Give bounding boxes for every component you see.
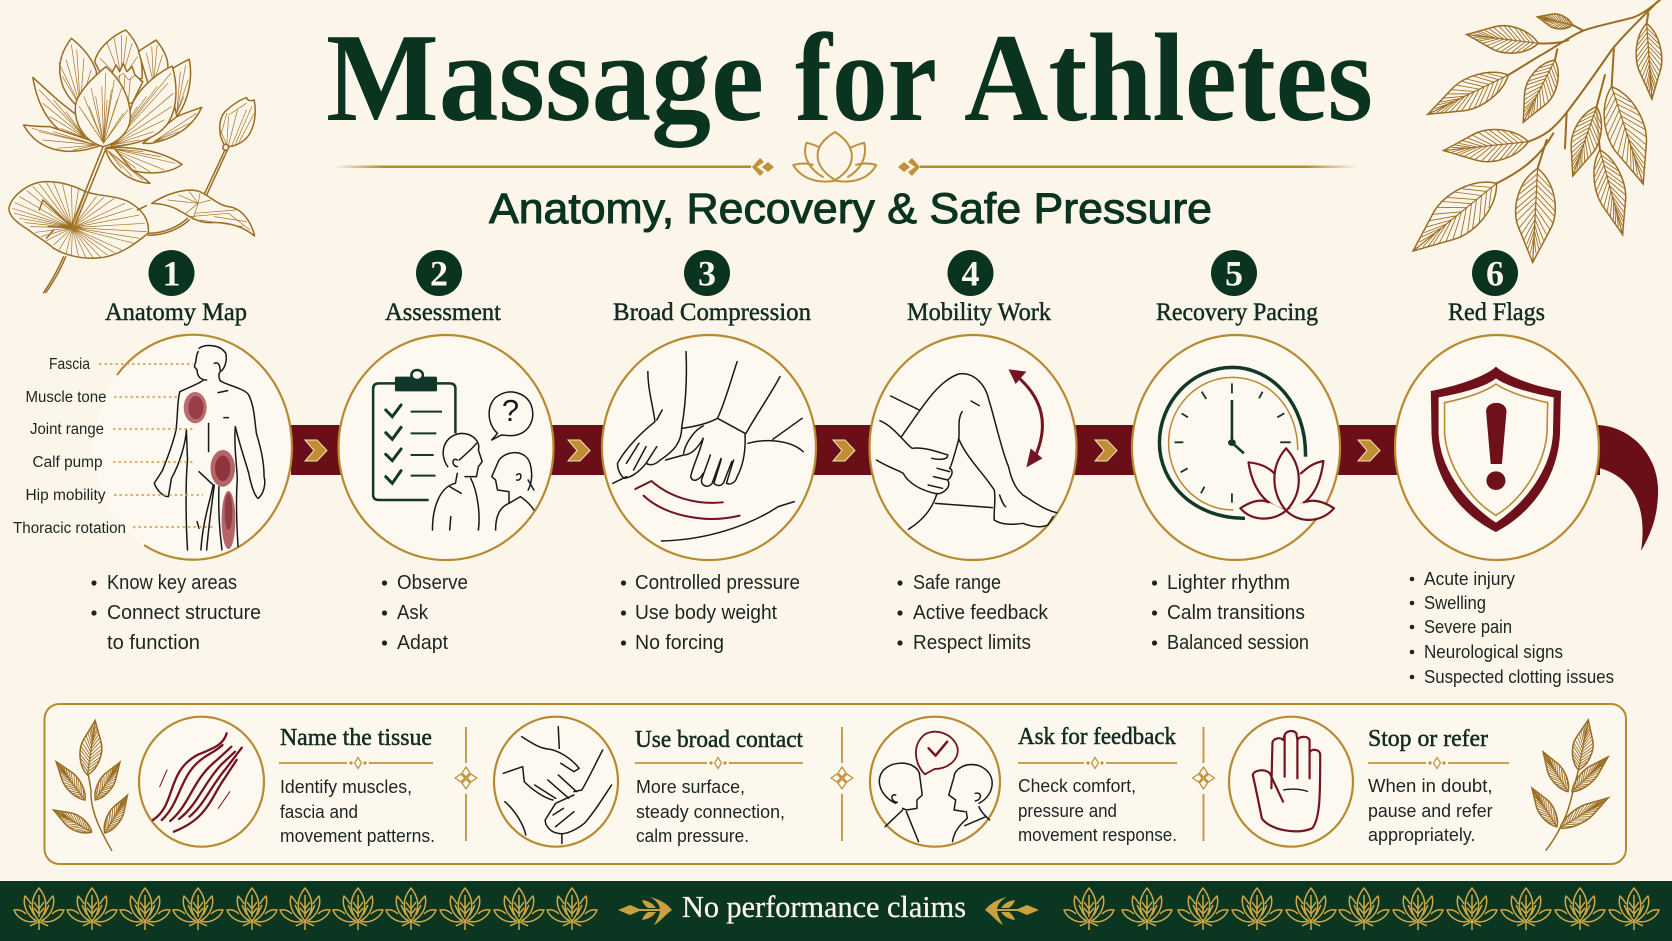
number badge 5: 5 (1225, 254, 1243, 294)
title: Athletes (964, 9, 1373, 148)
illustration: lotus flower top left (9, 30, 255, 293)
icon: raised hand (1253, 731, 1320, 831)
anatomy callout lines (99, 364, 215, 527)
description (1018, 776, 1177, 845)
bullets: recovery pacing: Lighter rhythm (1167, 572, 1290, 594)
bullets: recovery pacing: Calm transitions (1167, 602, 1305, 624)
bullets: anatomy map (91, 572, 261, 654)
number badge 4: 4 (962, 254, 980, 294)
step 5: recovery pacing (1132, 250, 1340, 654)
footer statement: No performance claims (682, 889, 966, 924)
title divider with lotus (333, 132, 1358, 182)
heading: assessment: Assessment (385, 299, 501, 326)
panel frame (44, 704, 1626, 864)
bullets: anatomy map: Connect structure (107, 602, 261, 624)
vertical divider 3 (1192, 727, 1214, 841)
title (326, 9, 1373, 148)
hands circle (494, 717, 618, 847)
heading: anatomy map: Anatomy Map (105, 299, 247, 326)
body figure with highlighted areas (154, 346, 265, 550)
bullets: assessment: Ask (397, 602, 429, 624)
question mark: ? (502, 393, 519, 428)
assessment circle (338, 335, 554, 560)
small divider (1368, 758, 1509, 768)
icon: left sprig arrow (618, 897, 672, 925)
heading: mobility work: Mobility Work (907, 299, 1051, 326)
anatomy labels: Muscle tone (26, 389, 106, 406)
tip: use broad contact (494, 717, 803, 847)
heading: stop or refer: Stop or refer (1368, 726, 1488, 752)
red flags circle (1395, 335, 1599, 560)
anatomy labels: Hip mobility (26, 487, 106, 504)
number badge 3 (684, 250, 730, 296)
bullets: broad compression: Controlled pressure (635, 572, 800, 594)
arrow chevrons on ribbon (305, 440, 1380, 461)
feedback circle (870, 717, 1000, 847)
title: for (795, 9, 937, 148)
heading: use broad contact: Use broad contact (635, 727, 803, 753)
icon: clipboard and two people (373, 370, 534, 530)
description: movement patterns. (280, 826, 435, 846)
bullets: assessment: Observe (397, 572, 468, 594)
muscle circle (139, 717, 264, 847)
icon: muscle fibres (153, 733, 242, 832)
icon: two faces with check bubble (879, 732, 992, 842)
step 4: mobility work (870, 250, 1076, 654)
bullets: broad compression (621, 572, 800, 654)
bullets: broad compression: No forcing (635, 632, 724, 654)
bullets: mobility work: Active feedback (913, 602, 1049, 624)
bullets: mobility work: Safe range (913, 572, 1001, 594)
bullets: red flags: Severe pain (1424, 617, 1512, 637)
recovery circle (1132, 335, 1340, 560)
bullets: red flags (1410, 569, 1614, 687)
ribbon connector with tail (291, 425, 1658, 551)
bullets: broad compression: Use body weight (635, 602, 777, 624)
description (280, 777, 435, 846)
step 1: anatomy map (13, 250, 292, 654)
anatomy labels: Fascia (49, 356, 90, 373)
footer band (0, 881, 1672, 941)
bullets: anatomy map: Know key areas (107, 572, 237, 594)
icon: hands applying pressure (613, 352, 803, 541)
description: When in doubt, (1368, 776, 1492, 796)
description: calm pressure. (636, 826, 749, 846)
compression circle (602, 335, 816, 560)
anatomy labels (13, 356, 126, 537)
number badge 3: 3 (698, 254, 716, 294)
tip: name the tissue (139, 717, 435, 847)
description (636, 777, 785, 846)
number badge 6: 6 (1486, 254, 1504, 294)
bullets: anatomy map: to function (107, 632, 200, 654)
bullets: assessment (382, 572, 468, 654)
subtitle: Anatomy, Recovery & Safe Pressure (489, 185, 1212, 233)
step 3: broad compression (602, 250, 816, 654)
icon: warning shield (1431, 367, 1561, 532)
bullets: assessment: Adapt (397, 632, 448, 654)
number badge 2 (416, 250, 462, 296)
description: Identify muscles, (280, 777, 412, 797)
title: Massage (326, 9, 764, 148)
panel: practice tips (44, 704, 1626, 864)
bullets: red flags: Acute injury (1424, 569, 1515, 589)
icon: bent knee with hand and range arrow (876, 369, 1057, 529)
number badge 4 (948, 250, 994, 296)
description: movement response. (1018, 825, 1177, 845)
vertical divider 1 (455, 727, 477, 841)
bullets: red flags: Swelling (1424, 593, 1486, 613)
left lotus pattern (14, 888, 597, 930)
description: steady connection, (636, 802, 785, 822)
small divider (1018, 758, 1177, 768)
description: Check comfort, (1018, 776, 1136, 796)
step 6: red flags (1395, 250, 1614, 687)
icon: clock with lotus (1159, 367, 1334, 520)
description (1368, 776, 1492, 845)
step 2: assessment (338, 250, 554, 654)
small divider (635, 758, 803, 768)
number badge 1: 1 (162, 254, 180, 294)
anatomy labels: Calf pump (32, 454, 102, 471)
right lotus pattern (1064, 888, 1659, 930)
heading: red flags: Red Flags (1448, 299, 1545, 326)
anatomy labels: Joint range (30, 421, 104, 438)
icon: right sprig (1526, 718, 1613, 851)
number badge 5 (1211, 250, 1257, 296)
icon: left sprig (50, 719, 133, 851)
anatomy circle (94, 335, 292, 560)
heading: ask for feedback: Ask for feedback (1018, 724, 1176, 750)
illustration: leaf branch top right (1400, 0, 1665, 267)
description: appropriately. (1368, 825, 1476, 845)
icon: two hands (503, 727, 612, 843)
bullets: mobility work: Respect limits (913, 632, 1031, 654)
number badge 2: 2 (430, 254, 448, 294)
number badge 1 (148, 250, 194, 296)
heading: name the tissue: Name the tissue (280, 725, 432, 751)
heading: broad compression: Broad Compression (613, 299, 811, 326)
icon: right sprig arrow (985, 897, 1039, 925)
small divider (279, 758, 433, 768)
description: More surface, (636, 777, 745, 797)
hand circle (1229, 717, 1353, 847)
bullets: recovery pacing (1152, 572, 1309, 654)
bullets: red flags: Suspected clotting issues (1424, 667, 1614, 687)
description: fascia and (280, 802, 358, 822)
bullets: mobility work (897, 572, 1049, 654)
description: pressure and (1018, 801, 1117, 821)
bullets: red flags: Neurological signs (1424, 642, 1563, 662)
number badge 6 (1472, 250, 1518, 296)
anatomy labels: Thoracic rotation (13, 520, 126, 537)
mobility circle (870, 335, 1076, 560)
bullets: recovery pacing: Balanced session (1167, 632, 1309, 654)
vertical divider 2 (831, 727, 853, 841)
heading: recovery pacing: Recovery Pacing (1156, 299, 1318, 326)
description: pause and refer (1368, 801, 1492, 821)
tip: stop or refer (1229, 717, 1509, 847)
tip: ask for feedback (870, 717, 1177, 847)
